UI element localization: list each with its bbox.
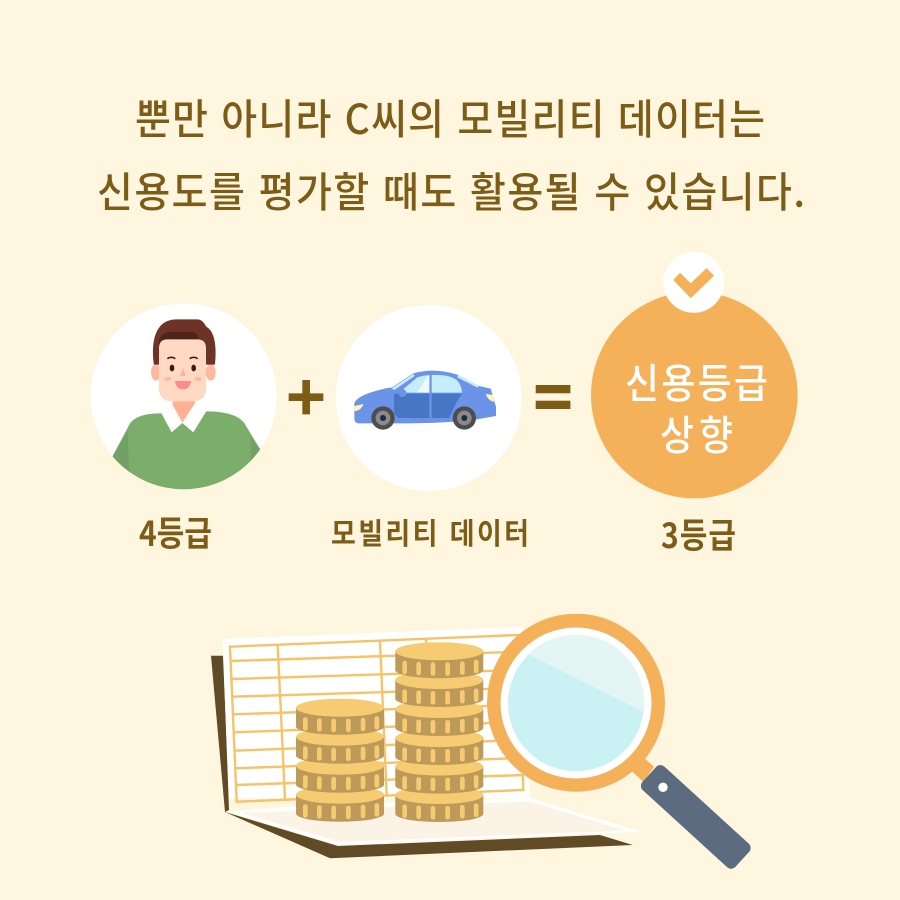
icon: equals (536, 385, 570, 409)
icon: car (354, 371, 496, 430)
illustration: ledger book (211, 627, 642, 858)
title: 뿐만 아니라 C씨의 모빌리티 데이터는 (135, 86, 765, 146)
label: 3등급: 3등급 (661, 510, 736, 559)
label: 모빌리티 데이터: 모빌리티 데이터 (331, 511, 529, 553)
panel: credit upgrade circle (591, 252, 798, 498)
title: 신용도를 평가할 때도 활용될 수 있습니다. (97, 159, 805, 219)
panel: car circle (336, 305, 522, 491)
title (97, 86, 805, 219)
table grid (230, 635, 523, 802)
icon: plus (289, 380, 323, 414)
icon: magnifying glass (487, 614, 753, 871)
badge text: 상향 (660, 404, 733, 463)
icon: coin stack left (296, 699, 384, 822)
panel: person circle (91, 303, 277, 493)
icon: coin stack right (395, 642, 483, 822)
badge text: 신용등급 (625, 352, 768, 411)
icon: person (107, 319, 267, 493)
icon: check badge (663, 252, 724, 313)
badge text (625, 352, 768, 463)
label: 4등급: 4등급 (139, 508, 212, 557)
